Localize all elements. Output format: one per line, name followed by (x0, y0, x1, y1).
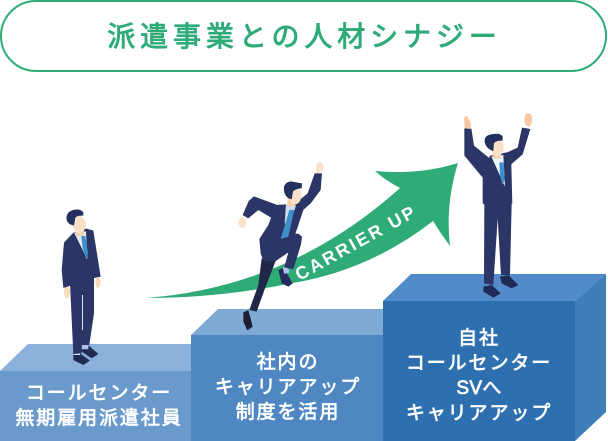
step 2: in-house career up program: 制度を活用 (236, 401, 340, 423)
figure: standing businessman (62, 209, 101, 365)
arrow: career up: CARRIER UP (292, 201, 420, 284)
arrow: career up (146, 163, 458, 298)
step 3: career up to call center supervisor (383, 274, 606, 441)
step 2: in-house career up program: 社内の (257, 351, 319, 373)
title (1, 1, 606, 71)
step 1: call center permanent staff: 無期雇用派遣社員 (15, 407, 183, 429)
step 2: in-house career up program (191, 309, 383, 441)
step 1: call center permanent staff: コールセンター (26, 382, 172, 404)
step 2: in-house career up program: キャリアアップ (215, 376, 361, 398)
step 3: career up to call center supervisor: キャリアアップ (406, 402, 552, 424)
title: 派遣事業との人材シナジー (107, 21, 502, 52)
figure: running businessman (238, 162, 324, 330)
step 3: career up to call center supervisor: コールセンター (406, 352, 552, 374)
figure: businessman raising both arms (464, 113, 532, 298)
step 1: call center permanent staff (0, 344, 191, 441)
step 3: career up to call center supervisor: SVへ (456, 378, 502, 399)
step 3: career up to call center supervisor: 自社 (458, 327, 500, 349)
